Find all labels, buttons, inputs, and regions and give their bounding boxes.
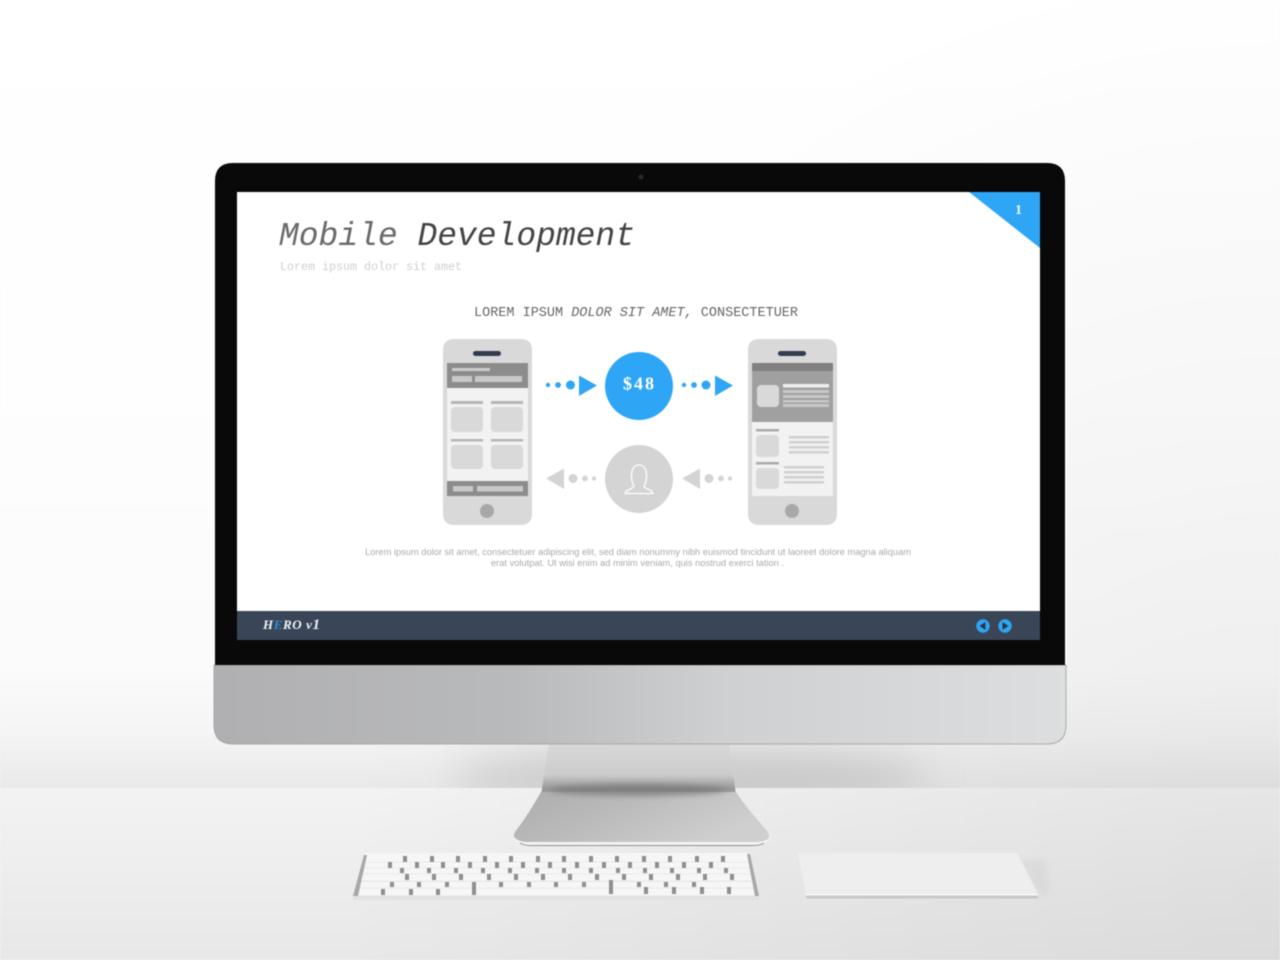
keyboard bbox=[353, 853, 759, 900]
trackpad bbox=[798, 853, 1050, 898]
desk surface bbox=[0, 788, 1280, 960]
keyboard body bbox=[353, 853, 759, 900]
trackpad shadow bbox=[1020, 860, 1050, 896]
price circle: $48 bbox=[623, 374, 654, 394]
body text: erat volutpat. Ut wisi enim ad minim veniam, quis nostrud exerci tation . bbox=[491, 558, 784, 569]
trackpad lower edge bbox=[806, 896, 1038, 898]
keyboard edge bbox=[353, 896, 759, 900]
user circle bbox=[605, 445, 673, 513]
arrow: price to right phone bbox=[682, 376, 733, 396]
monitor outer edge bbox=[213, 161, 1067, 665]
previous button bbox=[976, 619, 990, 633]
stand base bottom line bbox=[520, 843, 764, 846]
trackpad surface bbox=[798, 853, 1038, 894]
monitor stand bbox=[513, 744, 771, 846]
monitor bezel bbox=[215, 163, 1065, 665]
right phone bbox=[748, 339, 837, 525]
body text: Lorem ipsum dolor sit amet, consectetuer adipiscing elit, sed diam nonummy nibh euismod tincidunt ut laoreet dolore magna aliquam bbox=[365, 547, 911, 558]
monitor chin bbox=[214, 665, 1066, 744]
keyboard row lines bbox=[357, 862, 756, 888]
arrow: right phone to user bbox=[682, 468, 732, 489]
corner ribbon: 1 bbox=[1015, 203, 1022, 218]
trackpad edge bbox=[806, 894, 1038, 896]
title: Mobile Development bbox=[279, 218, 635, 255]
brand label: HERO v1 bbox=[262, 617, 320, 633]
price circle bbox=[605, 352, 673, 420]
corner ribbon bbox=[969, 192, 1040, 248]
stand base rim bbox=[513, 835, 771, 845]
section heading: LOREM IPSUM DOLOR SIT AMET, CONSECTETUER bbox=[474, 306, 798, 321]
arrow: user to left phone bbox=[546, 468, 596, 489]
left phone bbox=[443, 339, 532, 525]
stand shadow band bbox=[550, 784, 726, 796]
monitor shadow on wall bbox=[458, 744, 922, 788]
next button bbox=[998, 619, 1012, 633]
keyboard key gaps bbox=[381, 856, 734, 895]
monitor bbox=[213, 161, 1067, 744]
footer bar bbox=[237, 611, 1040, 640]
body text bbox=[365, 547, 911, 569]
webcam bbox=[638, 174, 644, 180]
stand neck bbox=[541, 744, 736, 795]
stand base bbox=[514, 792, 769, 842]
subtitle: Lorem ipsum dolor sit amet bbox=[280, 260, 462, 274]
slide screen bbox=[237, 192, 1040, 611]
keyboard side edges bbox=[353, 854, 759, 896]
arrow: left phone to price bbox=[546, 376, 597, 396]
